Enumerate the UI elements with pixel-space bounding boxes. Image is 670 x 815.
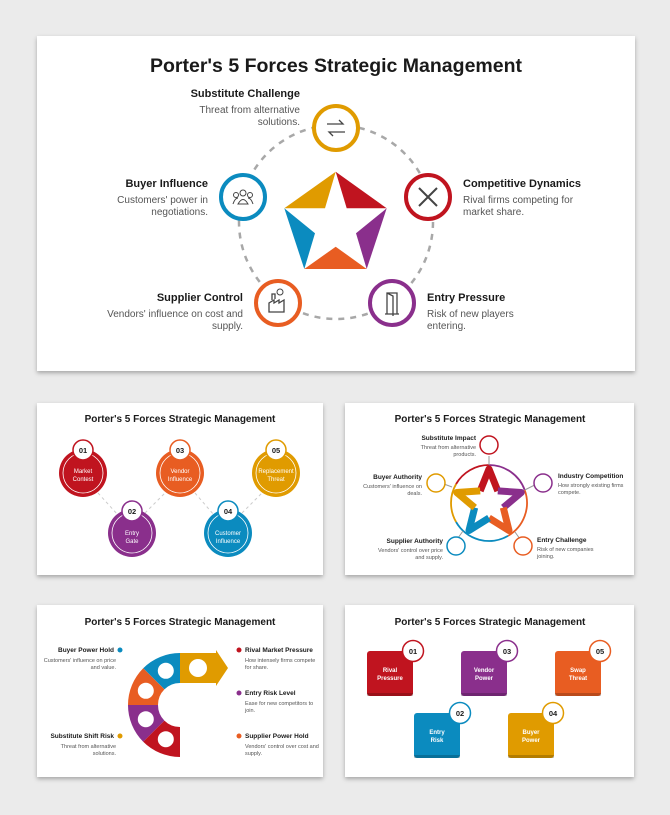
circle 01 xyxy=(59,440,107,497)
square 05 xyxy=(555,640,610,696)
text: substitute challenge xyxy=(191,88,300,128)
text: supplier power hold: supply. xyxy=(245,751,262,757)
C segments xyxy=(128,650,228,757)
icon: entry xyxy=(370,281,414,325)
text: supplier control xyxy=(107,292,243,332)
text: supplier control: Vendors' influence on cost and xyxy=(107,309,243,320)
circle 03: 03 xyxy=(176,446,184,455)
circle 02 xyxy=(108,501,156,557)
square 05: Swap xyxy=(570,668,586,674)
text: entry risk level: join. xyxy=(244,708,256,714)
text: substitute shift risk: Substitute Shift Risk xyxy=(50,733,114,740)
text: competitive dynamics: market share. xyxy=(463,207,524,218)
square 02: Risk xyxy=(431,738,444,744)
dashed ring xyxy=(239,125,433,319)
text: substitute shift risk xyxy=(50,733,122,757)
circle 05: Replacement xyxy=(258,469,294,475)
square 03: 03 xyxy=(503,647,511,656)
text: competitive dynamics: Rival firms competing for xyxy=(463,195,574,206)
text: rival market pressure: How intensely firms compete xyxy=(245,658,315,664)
icon: competitive xyxy=(406,175,450,219)
panel: squares xyxy=(345,605,634,777)
icon: buyer xyxy=(221,175,265,219)
star pentagon xyxy=(284,172,387,269)
square 02: Entry xyxy=(429,730,445,736)
ribbon star xyxy=(457,469,521,530)
text: industry competition: How strongly existing firms xyxy=(558,483,624,489)
text: buyer power hold: and value. xyxy=(91,665,116,671)
circle 02: Gate xyxy=(125,539,139,545)
text: entry challenge: Entry Challenge xyxy=(537,537,587,544)
icon: supplier xyxy=(256,281,300,325)
text: entry risk level: Entry Risk Level xyxy=(245,690,296,697)
square 02: 02 xyxy=(456,709,464,718)
circle 04: 04 xyxy=(224,507,233,516)
circle 04: Customer xyxy=(215,531,241,537)
text: supplier control: supply. xyxy=(212,321,243,332)
text: supplier power hold: Vendors' control over cost and xyxy=(245,744,319,750)
text: entry pressure: Risk of new players xyxy=(427,309,514,320)
panel: C arrow xyxy=(37,605,323,777)
circle 05: 05 xyxy=(272,446,280,455)
text: substitute impact: Substitute Impact xyxy=(421,435,477,442)
square 05: 05 xyxy=(596,647,604,656)
text: supplier authority xyxy=(378,538,443,561)
text: entry pressure xyxy=(427,292,514,332)
circle 03: Vendor xyxy=(170,469,190,475)
square 05: Threat xyxy=(569,676,587,682)
square 03: Power xyxy=(475,676,494,682)
square 01: 01 xyxy=(409,647,417,656)
text: buyer influence: negotiations. xyxy=(151,207,208,218)
text: entry risk level xyxy=(236,690,313,714)
text: buyer authority: Customers' influence on xyxy=(363,484,422,490)
circle 03 xyxy=(156,440,204,497)
circle 05 xyxy=(252,440,300,497)
ring arcs xyxy=(444,456,535,541)
square 03 xyxy=(461,640,518,696)
panel: main slide xyxy=(37,36,635,371)
circle 02: Entry xyxy=(125,531,139,537)
text: supplier control: Supplier Control xyxy=(157,292,243,304)
title: Porter's 5 Forces Strategic Management xyxy=(85,617,276,628)
text: rival market pressure: Rival Market Pressure xyxy=(245,647,313,654)
title: Porter's 5 Forces Strategic Management xyxy=(395,414,586,425)
text: supplier power hold: Supplier Power Hold xyxy=(245,733,309,740)
text: buyer power hold: Customers' influence on price xyxy=(44,658,116,664)
text: buyer authority xyxy=(363,474,422,497)
text: buyer power hold xyxy=(44,647,122,671)
text: entry challenge: joining. xyxy=(536,554,555,560)
icon: substitute xyxy=(314,106,358,150)
text: substitute challenge: solutions. xyxy=(258,117,300,128)
text: competitive dynamics xyxy=(463,178,581,218)
square 01 xyxy=(367,640,424,696)
text: competitive dynamics: Competitive Dynamics xyxy=(463,178,581,190)
title: Porter's 5 Forces Strategic Management xyxy=(85,414,276,425)
text: buyer influence: Customers' power in xyxy=(117,195,208,206)
circle 04 xyxy=(204,501,252,557)
text: entry challenge: Risk of new companies xyxy=(537,547,594,553)
square 04: Buyer xyxy=(522,730,540,736)
title: Porter's 5 Forces Strategic Management xyxy=(395,617,586,628)
square 03: Vendor xyxy=(474,668,495,674)
text: buyer authority: deals. xyxy=(407,491,422,497)
text: substitute challenge: Threat from alternative xyxy=(199,105,300,116)
text: rival market pressure: for share. xyxy=(245,665,269,671)
square 04: 04 xyxy=(549,709,558,718)
text: entry challenge xyxy=(536,537,594,560)
square 01: Pressure xyxy=(377,676,404,682)
text: industry competition: Industry Competition xyxy=(558,473,623,480)
text: supplier authority: and supply. xyxy=(415,555,443,561)
text: industry competition: compete. xyxy=(558,490,581,496)
text: substitute impact: products. xyxy=(453,452,476,458)
circle 04: Influence xyxy=(216,539,241,545)
icons xyxy=(427,436,552,555)
square 04 xyxy=(508,702,564,758)
circle 01: Market xyxy=(74,469,92,475)
text: substitute shift risk: Threat from alternative xyxy=(61,744,116,750)
text: supplier authority: Vendors' control over price xyxy=(378,548,443,554)
text: substitute challenge: Substitute Challenge xyxy=(191,88,300,100)
text: supplier authority: Supplier Authority xyxy=(387,538,443,545)
panel: circles zigzag xyxy=(37,403,323,575)
text: substitute impact xyxy=(421,435,477,458)
text: substitute shift risk: solutions. xyxy=(93,751,116,757)
circle 03: Influence xyxy=(168,477,193,483)
text: rival market pressure xyxy=(236,647,315,671)
text: buyer power hold: Buyer Power Hold xyxy=(58,647,114,654)
circle 05: Threat xyxy=(267,477,285,483)
panel: ribbon star xyxy=(345,403,634,575)
square 04: Power xyxy=(522,738,541,744)
square 02 xyxy=(414,702,470,758)
text: industry competition xyxy=(558,473,624,496)
text: entry risk level: Ease for new competitors to xyxy=(245,701,313,707)
text: substitute impact: Threat from alternative xyxy=(421,445,476,451)
text: buyer influence xyxy=(117,178,208,218)
text: supplier power hold xyxy=(236,733,319,757)
title: Porter's 5 Forces Strategic Management xyxy=(150,55,523,77)
text: entry pressure: Entry Pressure xyxy=(427,292,505,304)
circle 01: Contest xyxy=(73,477,94,483)
square 01: Rival xyxy=(383,668,398,674)
circle 02: 02 xyxy=(128,507,136,516)
text: buyer influence: Buyer Influence xyxy=(125,178,208,190)
circle 01: 01 xyxy=(79,446,87,455)
text: buyer authority: Buyer Authority xyxy=(373,474,422,481)
text: entry pressure: entering. xyxy=(427,321,466,332)
